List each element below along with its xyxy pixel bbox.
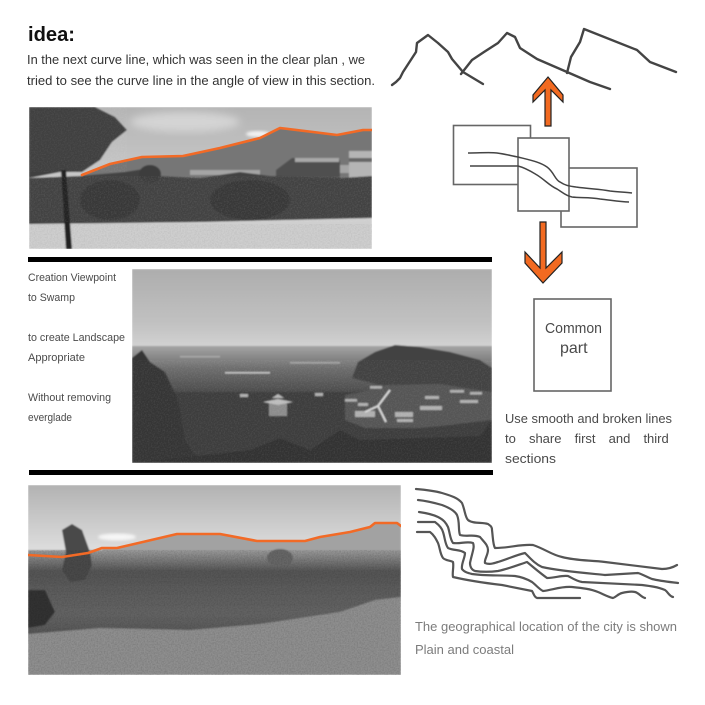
text: smooth and broken lines note: sections bbox=[505, 451, 557, 466]
photo: reed field with orange ridge line bbox=[28, 485, 401, 675]
text: smooth and broken lines note bbox=[505, 411, 672, 466]
intro text block: tried to see the curve line in the angle of view in this section. bbox=[27, 73, 375, 88]
intro text block bbox=[27, 52, 375, 88]
text: creation viewpoint note: everglade bbox=[28, 412, 72, 424]
box: common part bbox=[534, 299, 611, 391]
divider bar bottom bbox=[29, 470, 493, 475]
pavilion bbox=[263, 394, 293, 416]
divider bar top bbox=[28, 257, 492, 262]
text: creation viewpoint note: Without removing bbox=[28, 392, 111, 404]
text: creation viewpoint note: Appropriate bbox=[28, 352, 85, 364]
text: smooth and broken lines note: Use smooth and broken lines bbox=[505, 411, 672, 426]
photo: hillside with orange ridge line bbox=[29, 107, 372, 249]
text: geographical location caption bbox=[415, 619, 677, 657]
diagram: overlapping plan sections bbox=[454, 126, 637, 227]
text: smooth and broken lines note: to share first and third bbox=[505, 431, 669, 446]
arrow: up bbox=[533, 77, 563, 126]
box: common part: part bbox=[560, 340, 588, 357]
text: creation viewpoint note: Creation Viewpoint bbox=[28, 272, 116, 284]
text: creation viewpoint note: to Swamp bbox=[28, 292, 75, 304]
heading: idea: idea: bbox=[28, 24, 75, 46]
text: creation viewpoint note bbox=[28, 272, 125, 424]
intro text block: In the next curve line, which was seen in the clear plan , we bbox=[27, 52, 365, 67]
sketch: contour lines map bbox=[416, 489, 678, 598]
sketch: mountain section lines bbox=[392, 29, 676, 89]
photo: aerial view of village and plain bbox=[132, 269, 492, 463]
box: common part: Common bbox=[545, 320, 602, 337]
arrow: down bbox=[525, 222, 562, 283]
text: geographical location caption: Plain and coastal bbox=[415, 642, 514, 657]
text: creation viewpoint note: to create Landscape bbox=[28, 332, 125, 344]
text: geographical location caption: The geographical location of the city is shown bbox=[415, 619, 677, 634]
